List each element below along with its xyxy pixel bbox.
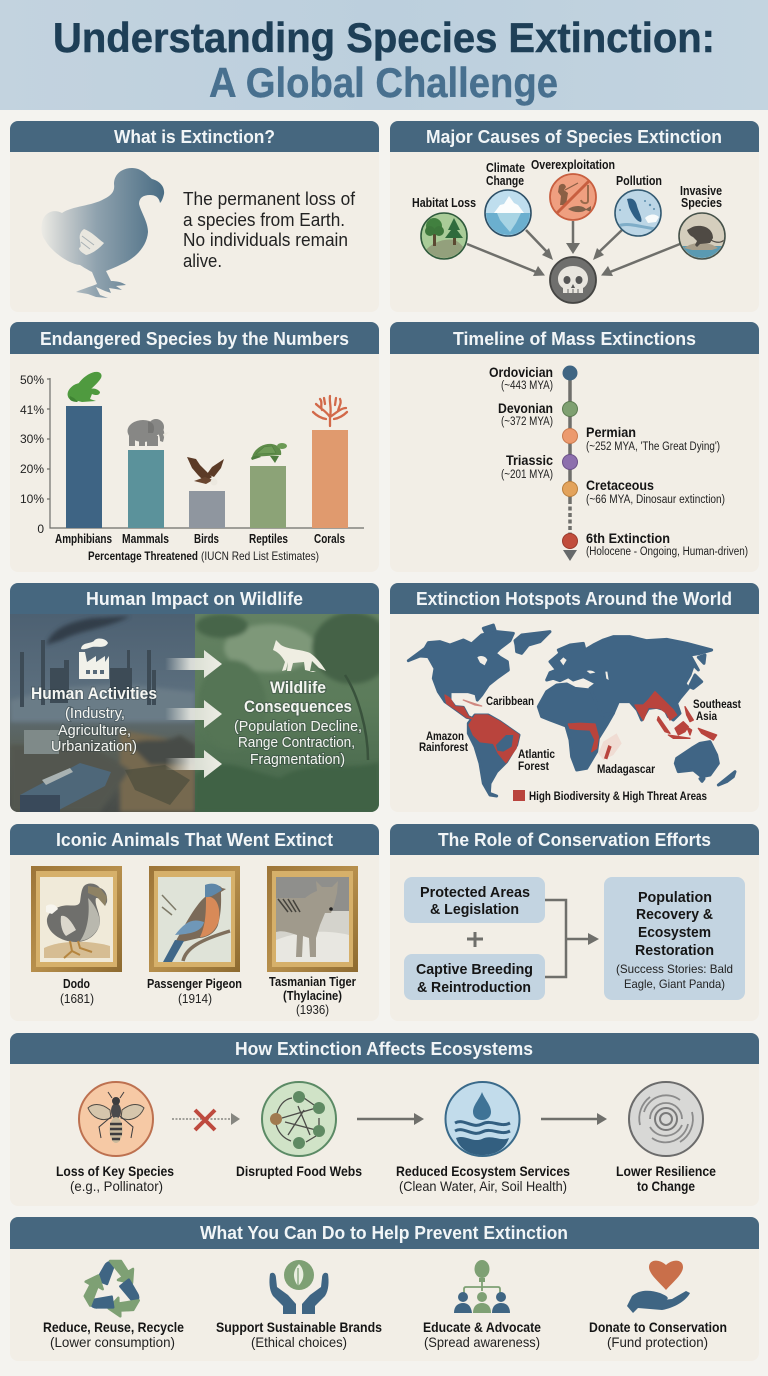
box: captive breeding: & Reintroduction — [417, 979, 531, 996]
wildlife consequences text — [234, 679, 362, 768]
wildlife consequences text: Range Contraction, — [238, 735, 355, 751]
action labels: (Fund protection) — [607, 1334, 708, 1350]
box: protected areas — [404, 877, 545, 923]
human activities text: Human Activities — [31, 685, 157, 703]
map labels: Asia — [696, 709, 717, 723]
dashed arrow with red cross — [172, 1110, 240, 1130]
panel: extinction hotspots map — [390, 583, 759, 812]
cause labels: Habitat Loss — [412, 196, 476, 210]
icon: eagle — [187, 457, 224, 486]
plus sign — [467, 932, 483, 947]
chart axes and tick labels: 10% — [20, 492, 44, 506]
icon: bee — [79, 1082, 153, 1156]
arrow — [357, 1113, 424, 1125]
human activities text — [31, 685, 157, 755]
panel: major causes — [390, 121, 759, 312]
map labels: Rainforest — [419, 740, 468, 754]
map legend: High Biodiversity & High Threat Areas — [529, 789, 707, 803]
step labels — [56, 1163, 716, 1194]
cause labels — [412, 158, 722, 210]
timeline labels: (~443 MYA) — [501, 380, 553, 392]
wildlife consequences text: Consequences — [244, 698, 352, 716]
timeline labels: (~66 MYA, Dinosaur extinction) — [586, 494, 725, 506]
cause labels: Climate — [486, 161, 525, 175]
chart axes and tick labels: 0 — [37, 522, 44, 536]
Africa — [538, 684, 613, 770]
map labels: Amazon — [426, 729, 464, 743]
title banner: Understanding Species Extinction: — [53, 14, 715, 61]
step labels: to Change — [637, 1178, 695, 1194]
captions: (1914) — [178, 992, 212, 1006]
definition text: alive. — [183, 250, 222, 271]
step labels: Lower Resilience — [616, 1163, 716, 1179]
action labels: (Spread awareness) — [424, 1334, 540, 1350]
box: population recovery: Restoration — [635, 942, 714, 959]
captions: Passenger Pigeon — [147, 977, 242, 991]
panel: human impact on wildlife — [10, 583, 392, 812]
icon: invasive species — [679, 213, 725, 260]
action labels: (Ethical choices) — [251, 1334, 347, 1350]
axis caption: (IUCN Red List Estimates) — [201, 549, 319, 563]
action labels: Reduce, Reuse, Recycle — [43, 1319, 184, 1335]
category labels: Reptiles — [249, 532, 288, 546]
box: population recovery: Population — [638, 889, 712, 906]
icon: donate heart in hand — [627, 1261, 690, 1313]
map labels: Atlantic — [518, 747, 555, 761]
box: protected areas: & Legislation — [430, 901, 519, 918]
heading: What You Can Do to Help Prevent Extinction — [200, 1222, 568, 1243]
heading: Major Causes of Species Extinction — [426, 126, 722, 147]
map labels: Southeast — [693, 697, 741, 711]
step labels: Reduced Ecosystem Services — [396, 1163, 570, 1179]
heading: What is Extinction? — [114, 126, 275, 147]
heading: How Extinction Affects Ecosystems — [235, 1038, 533, 1059]
definition text: The permanent loss of — [183, 188, 356, 209]
wildlife consequences text: Fragmentation) — [250, 752, 345, 768]
timeline labels: (~201 MYA) — [501, 469, 553, 481]
timeline labels: (~372 MYA) — [501, 416, 553, 428]
action labels: Donate to Conservation — [589, 1319, 727, 1335]
icon: climate change — [485, 190, 531, 237]
axis caption: Percentage Threatened — [88, 549, 198, 563]
Madagascar highlight — [598, 733, 622, 760]
panel: what you can do — [10, 1217, 759, 1361]
heading: Extinction Hotspots Around the World — [416, 588, 732, 609]
definition text: a species from Earth. — [183, 209, 345, 230]
box: population recovery — [604, 877, 745, 1000]
icon: pollution — [615, 190, 661, 236]
heading: Timeline of Mass Extinctions — [453, 328, 696, 349]
bars — [66, 406, 348, 528]
cause labels: Species — [681, 196, 722, 210]
chart axes and tick labels: 30% — [20, 432, 44, 446]
panel: timeline of mass extinctions — [390, 322, 759, 572]
map labels: Caribbean — [486, 694, 534, 708]
map labels — [419, 694, 741, 776]
human activities text: Agriculture, — [58, 723, 131, 739]
heading: The Role of Conservation Efforts — [438, 829, 711, 850]
category labels: Mammals — [122, 532, 169, 546]
icon: sustainable hands with leaf — [269, 1260, 329, 1314]
map labels: Forest — [518, 759, 549, 773]
scene: forest side — [195, 614, 379, 812]
portrait: dodo — [31, 866, 122, 972]
icon: resilience rings — [629, 1082, 703, 1156]
Eurasia — [547, 637, 712, 720]
timeline labels: Devonian — [498, 400, 553, 416]
step labels: Loss of Key Species — [56, 1163, 174, 1179]
cause labels: Overexploitation — [531, 158, 615, 172]
portrait: passenger pigeon — [149, 866, 240, 972]
Greenland — [515, 632, 550, 653]
chart axes and tick labels: 50% — [20, 373, 44, 387]
bracket arrow — [545, 900, 599, 977]
panel: iconic extinct animals — [10, 824, 379, 1021]
hotspots — [445, 692, 717, 763]
category labels — [55, 532, 345, 546]
icon: dodo silhouette — [41, 168, 164, 298]
heading: Iconic Animals That Went Extinct — [56, 829, 333, 850]
axis caption — [88, 549, 319, 563]
Australia — [675, 742, 718, 777]
title banner — [0, 0, 768, 110]
cause arrows — [467, 221, 680, 276]
category labels: Birds — [194, 532, 219, 546]
arrow — [541, 1113, 607, 1125]
wildlife consequences text: Wildlife — [270, 679, 326, 697]
panel heading band — [10, 583, 379, 614]
timeline line and markers — [562, 366, 578, 561]
map cut-outs — [477, 656, 609, 680]
panel: what is extinction — [10, 121, 379, 312]
wildlife consequences text: (Population Decline, — [234, 719, 362, 735]
captions: (Thylacine) — [283, 989, 342, 1003]
title banner: A Global Challenge — [209, 59, 558, 106]
captions: Tasmanian Tiger — [269, 975, 356, 989]
captions — [60, 975, 356, 1017]
icon: water — [446, 1082, 520, 1156]
human activities text: (Industry, — [65, 706, 125, 722]
icon: factory — [79, 639, 109, 679]
panel: role of conservation — [390, 824, 759, 1021]
portrait: tasmanian tiger — [267, 866, 358, 972]
step labels: Disrupted Food Webs — [236, 1163, 362, 1179]
step labels: (Clean Water, Air, Soil Health) — [399, 1178, 567, 1194]
timeline labels: Permian — [586, 424, 636, 440]
icon: educate group — [454, 1260, 510, 1313]
icon: frog — [65, 372, 102, 405]
category labels: Corals — [314, 532, 345, 546]
chart axes and tick labels: 41% — [20, 403, 44, 417]
box: population recovery: (Success Stories: Bald — [616, 962, 733, 976]
chart axes and tick labels: 20% — [20, 462, 44, 476]
icon: turtle — [251, 443, 287, 463]
cause labels: Pollution — [616, 174, 662, 188]
icon: coral — [313, 396, 347, 426]
box: captive breeding — [404, 954, 545, 1000]
cause labels: Change — [486, 174, 524, 188]
box: population recovery: Eagle, Giant Panda) — [624, 977, 725, 991]
box: population recovery: Ecosystem — [638, 924, 711, 941]
cause labels: Invasive — [680, 184, 722, 198]
timeline labels: Ordovician — [489, 364, 553, 380]
action labels: (Lower consumption) — [50, 1334, 175, 1350]
captions: (1681) — [60, 992, 94, 1006]
action labels: Support Sustainable Brands — [216, 1319, 382, 1335]
islands — [483, 625, 735, 785]
heading: Endangered Species by the Numbers — [40, 328, 349, 349]
captions: (1936) — [296, 1003, 329, 1017]
action labels: Educate & Advocate — [423, 1319, 541, 1335]
timeline labels: Triassic — [506, 452, 553, 468]
definition text — [183, 188, 356, 271]
South America — [468, 715, 519, 796]
chart axes and tick labels — [20, 373, 364, 536]
icon: elephant — [128, 419, 169, 446]
box: captive breeding: Captive Breeding — [416, 961, 533, 978]
icon: overexploitation — [550, 174, 596, 220]
world map — [408, 625, 735, 796]
captions: Dodo — [63, 977, 90, 991]
timeline labels: Cretaceous — [586, 477, 654, 493]
definition text: No individuals remain — [183, 229, 348, 250]
icon: wolf — [273, 640, 326, 672]
box: protected areas: Protected Areas — [420, 884, 530, 901]
timeline labels — [489, 364, 748, 558]
panel: how extinction affects ecosystems — [10, 1033, 759, 1206]
icon: recycle — [79, 1261, 145, 1320]
North America — [408, 632, 513, 719]
icon: food web — [262, 1082, 336, 1156]
timeline labels: (~252 MYA, 'The Great Dying') — [586, 441, 720, 453]
box: population recovery: Recovery & — [636, 906, 713, 923]
step labels: (e.g., Pollinator) — [70, 1178, 163, 1194]
panel heading band: Human Impact on Wildlife — [86, 588, 303, 609]
map labels: Madagascar — [597, 762, 655, 776]
scene: industrial side — [10, 600, 195, 812]
timeline labels: 6th Extinction — [586, 530, 670, 546]
category labels: Amphibians — [55, 532, 112, 546]
icon: skull extinction — [550, 257, 596, 303]
panel: endangered species bar chart — [10, 322, 379, 572]
action labels — [43, 1319, 727, 1350]
flow arrows — [165, 650, 222, 778]
icon: habitat loss — [421, 213, 468, 259]
human activities text: Urbanization) — [51, 739, 137, 755]
